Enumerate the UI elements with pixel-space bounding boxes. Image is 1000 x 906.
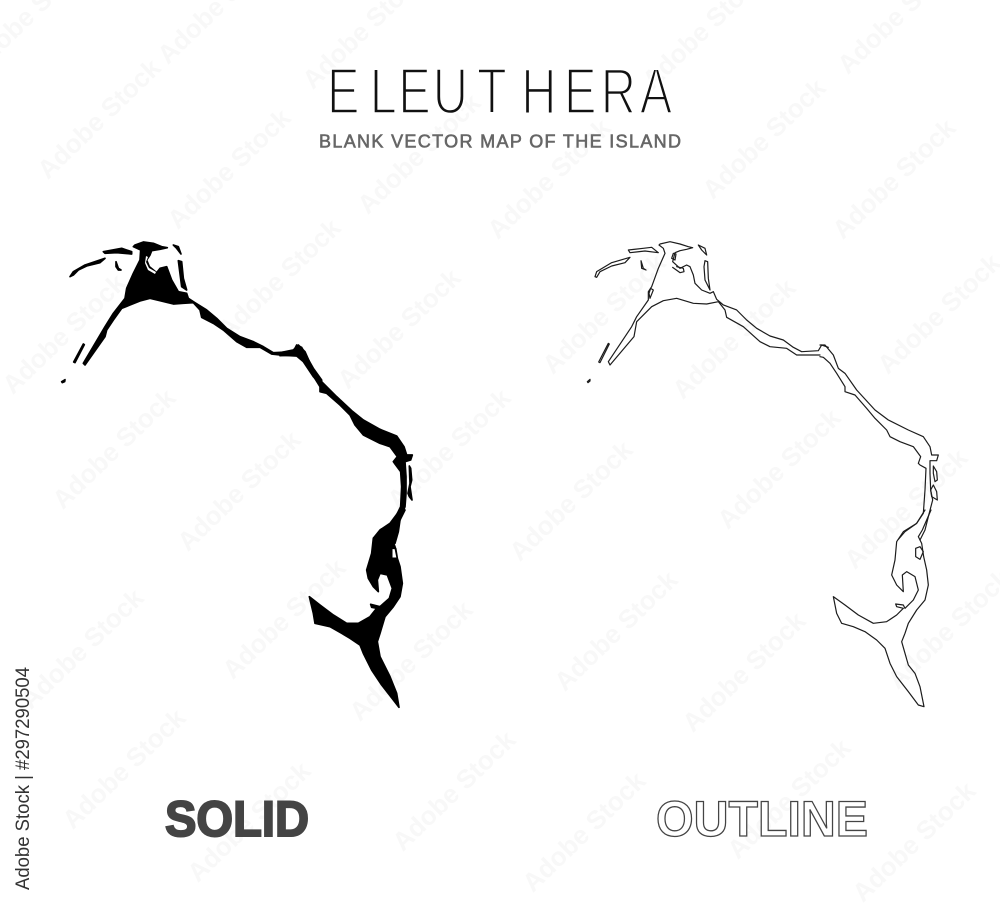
watermark pattern: Adobe Stock [181, 755, 317, 888]
watermark pattern: Adobe Stock [666, 272, 802, 405]
watermark pattern: Adobe Stock [56, 702, 192, 835]
watermark pattern: Adobe Stock [711, 402, 847, 535]
watermark pattern: Adobe Stock [31, 52, 167, 185]
watermark pattern: Adobe Stock [216, 552, 352, 685]
watermark pattern: Adobe Stock [548, 564, 684, 697]
outline: southern section [833, 510, 931, 707]
watermark pattern: Adobe Stock [846, 775, 982, 906]
title: ELEUTHERA [327, 56, 673, 128]
watermark pattern: Adobe Stock [536, 247, 672, 380]
label: outline: OUTLINE [656, 791, 868, 847]
watermark pattern: Adobe Stock [211, 212, 347, 345]
watermark pattern: Adobe Stock [171, 424, 307, 557]
solid: central section [280, 345, 412, 543]
solid: northern section [62, 242, 322, 385]
map: solid island [62, 242, 412, 707]
watermark pattern: Adobe Stock [503, 434, 639, 567]
map: outline island [587, 242, 938, 707]
solid: southern section [309, 510, 405, 707]
subtitle: BLANK VECTOR MAP OF THE ISLAND [319, 132, 681, 152]
watermark pattern: Adobe Stock [386, 724, 522, 857]
watermark pattern: Adobe Stock [381, 382, 517, 515]
watermark pattern: Adobe Stock [516, 765, 652, 898]
watermark pattern: Adobe Stock [676, 605, 812, 738]
solid: top white lagoon [145, 256, 156, 274]
watermark pattern: Adobe Stock [331, 262, 467, 395]
watermark pattern: Adobe Stock [161, 102, 297, 235]
watermark pattern: Adobe Stock [838, 442, 974, 575]
stock id side text: Adobe Stock | #297290504 [13, 667, 34, 890]
watermark pattern: Adobe Stock [721, 732, 857, 865]
watermark pattern: Adobe Stock [696, 72, 832, 205]
label: solid: SOLID [165, 791, 309, 847]
watermark pattern: Adobe Stock [481, 112, 617, 245]
outline: central section [820, 345, 938, 540]
watermark pattern: Adobe Stock [0, 267, 132, 400]
watermark pattern: Adobe Stock [46, 382, 182, 515]
watermark pattern: Adobe Stock [14, 582, 150, 715]
outline: northern section [587, 242, 828, 383]
watermark pattern: Adobe Stock [826, 112, 962, 245]
watermark pattern: Adobe Stock [351, 87, 487, 220]
watermark pattern: Adobe Stock [343, 594, 479, 727]
